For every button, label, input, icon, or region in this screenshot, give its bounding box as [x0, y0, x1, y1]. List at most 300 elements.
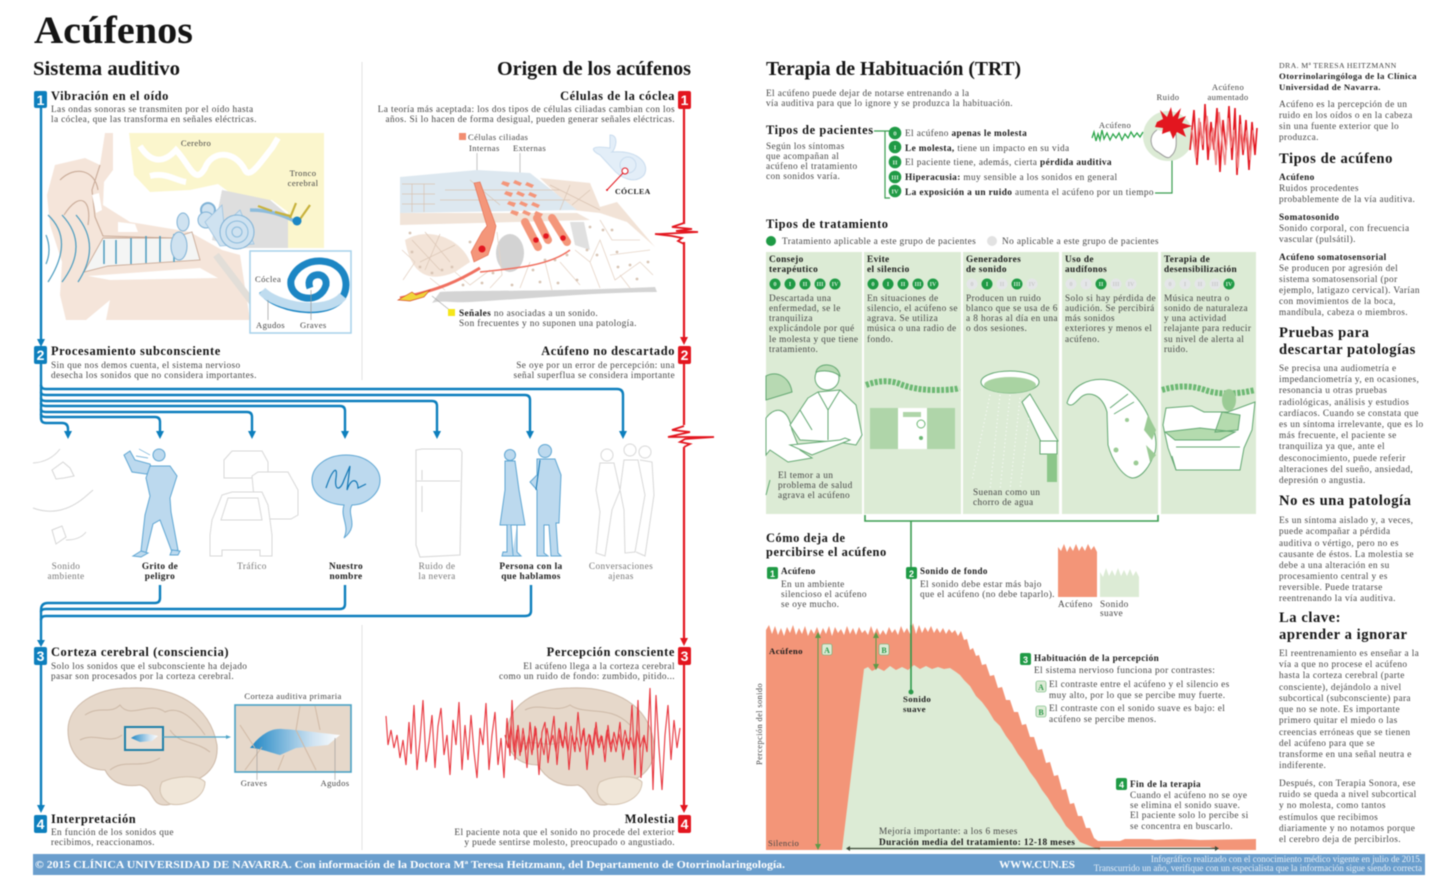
icon: grito de peligro: [124, 449, 180, 557]
step 2: sonido de fondo: El sonido debe estar más bajo: [920, 580, 1042, 590]
illustration: ear anatomy: Cerebro: [181, 138, 211, 148]
step 4: interpretación: En función de los sonidos que: [51, 827, 174, 838]
panel: uso de audífonos: [1062, 252, 1158, 514]
sidebar: la clave: el cerebro deja de percibirlos.: [1279, 835, 1401, 845]
step 3: corteza cerebral: [34, 645, 247, 682]
panel: uso de audífonos: III: [1112, 282, 1120, 288]
patient types bracket and list: Hiperacusia: muy sensible a los sonidos en general: [905, 173, 1117, 183]
panel: generadores de sonido: a 8 horas al día en una: [966, 314, 1058, 324]
sidebar: pruebas para descartar patologías: radiológicas, análisis y estudios: [1279, 398, 1409, 408]
heading: cómo deja de percibirse: [766, 531, 887, 559]
legend: células ciliadas: [459, 132, 546, 182]
patient types bracket and list: II: [892, 160, 898, 166]
sidebar: pruebas para descartar patologías: alteraciones del sueño, ansiedad,: [1279, 465, 1413, 475]
sidebar: no es una patología: [1279, 493, 1414, 604]
label: conversaciones ajenas: Conversaciones: [589, 562, 653, 572]
origin 4: molestia: El paciente nota que el sonido no procede del exterior: [454, 828, 676, 838]
step 2: sonido de fondo: que el acúfeno (no debe taparlo).: [920, 589, 1055, 600]
chart: perception over time: Duración media del tratamiento: 12-18 meses: [879, 838, 1075, 848]
sidebar: author and intro: Otorrinolaringóloga de la Clínica: [1279, 71, 1417, 81]
origin 2: acúfeno no descartado: [514, 344, 691, 381]
sidebar: la clave: creencias erróneas que se tienen: [1279, 728, 1410, 738]
panel: terapia de desensibilización: y una actividad: [1164, 314, 1226, 324]
origin 2: acúfeno no descartado: Se oye por un error de percepción: una: [516, 361, 675, 371]
step 1: acúfeno: silencioso el acúfeno: [781, 589, 867, 600]
footer band: Infográfico realizado con el conocimiento médico vigente en julio de 2015.: [1151, 854, 1422, 864]
sidebar: tipos de acúfeno: sistema somatosensorial (por: [1279, 274, 1398, 285]
panel: uso de audífonos: Uso de: [1065, 255, 1094, 265]
sidebar: la clave: diariamente y no notamos porque: [1279, 824, 1415, 834]
panel: generadores de sonido: III: [1013, 282, 1021, 288]
sidebar: tipos de acúfeno: vascular (pulsátil).: [1279, 234, 1356, 245]
sidebar: la clave: Después, con Terapia Sonora, ese: [1279, 779, 1416, 789]
panel: terapia de desensibilización: sonido de naturaleza: [1164, 304, 1248, 314]
step 4: fin de la terapia: El paciente solo lo percibe si: [1130, 811, 1249, 821]
sidebar: tipos de acúfeno: Somatosonido: [1279, 213, 1339, 223]
chart: perception over time: Silencio: [768, 838, 799, 848]
step 3: habituación de la percepción: 3: [1023, 655, 1028, 665]
step 1: acúfeno: se oye mucho.: [781, 600, 839, 610]
patient types bracket and list: I: [894, 144, 897, 152]
icon: speech bubble nuestro nombre: [312, 455, 380, 538]
label: sonido ambiente: Sonido: [52, 562, 80, 572]
step 2: procesamiento subconsciente: Sin que nos demos cuenta, el sistema nervioso: [51, 361, 241, 371]
chart: perception over time: Sonido: [903, 694, 931, 704]
chart: perception over time: suave: [903, 704, 926, 714]
heading: cómo deja de percibirse: percibirse el acúfeno: [766, 545, 887, 559]
step 4: fin de la terapia: Cuando el acúfeno no se oye: [1130, 790, 1247, 801]
panel: uso de audífonos: 0: [1070, 282, 1072, 288]
panel: generadores de sonido: 0: [970, 282, 974, 288]
sidebar: pruebas para descartar patologías: tranquiliza ya que, ante el: [1279, 442, 1385, 452]
legend: células ciliadas: Células ciliadas: [468, 132, 529, 142]
step 3: habituación de la percepción: acúfeno se percibe menos.: [1049, 714, 1157, 725]
label: conversaciones ajenas: ajenas: [608, 572, 634, 582]
step 1: vibración en el oído: Las ondas sonoras se transmiten por el oído hasta: [51, 105, 253, 115]
step 3: habituación de la percepción: muy alto, por lo que se percibe muy fuerte.: [1049, 690, 1225, 701]
panel: consejo terapéutico: tranquiliza: [769, 314, 813, 324]
sidebar: author and intro: DRA. Mª TERESA HEITZMANN: [1279, 61, 1397, 70]
panel: consejo terapéutico: Consejo: [769, 255, 804, 265]
column dividers: [361, 62, 363, 850]
sidebar: tipos de acúfeno: Acúfeno: [1279, 173, 1315, 183]
step 3: habituación de la percepción: El contraste con el sonido suave es bajo: el: [1049, 704, 1225, 714]
blue arrowheads: [37, 339, 627, 813]
origin 1: células de la cóclea: 1: [681, 92, 689, 108]
panel: consejo terapéutico: tratamiento.: [769, 345, 818, 355]
heading: cómo deja de percibirse: Cómo deja de: [766, 531, 846, 545]
step 1: acúfeno: En un ambiente: [781, 580, 845, 590]
step 2: procesamiento subconsciente: Procesamiento subconsciente: [51, 344, 221, 358]
sidebar: la clave: subcortical (subconsciente) para: [1279, 693, 1411, 704]
origin 1: células de la cóclea: La teoría más aceptada: los dos tipos de células ciliadas cambian con los: [378, 105, 675, 115]
inset: corteza auditiva primaria: Corteza auditiva primaria: [244, 691, 342, 701]
mini chart: acúfeno vs sonido suave: Sonido: [1100, 600, 1129, 610]
panel: consejo terapéutico: problema de salud: [778, 481, 853, 491]
panel: generadores de sonido: [963, 252, 1059, 514]
panel: generadores de sonido: I: [986, 282, 989, 288]
inset: corteza auditiva primaria: Graves: [241, 778, 268, 788]
sidebar: no es una patología: reversible. Puede tratarse: [1279, 583, 1383, 593]
origin 3: percepción consciente: 3: [681, 648, 689, 664]
step 3: habituación de la percepción: Habituación de la percepción: [1034, 653, 1159, 663]
panel: terapia de desensibilización: I: [1184, 282, 1187, 288]
sidebar: pruebas para descartar patologías: cardíacos. Cuando se constata que: [1279, 409, 1419, 419]
note: señales: Son frecuentes y no suponen una patología.: [459, 318, 637, 329]
panel: consejo terapéutico: enfermedad, se le: [769, 303, 841, 314]
chart: perception over time: [755, 623, 1256, 851]
legend: células ciliadas: Internas: [469, 143, 500, 153]
illustration: hearing aid: [1067, 379, 1156, 478]
step 3: habituación de la percepción: A: [1038, 683, 1044, 692]
panel: terapia de desensibilización: IV: [1226, 282, 1233, 288]
legend: células ciliadas: Externas: [513, 143, 546, 153]
step 1: vibración en el oído: la cóclea, que las transforma en señales eléctricas.: [51, 114, 257, 125]
step 1: vibración en el oído: Vibración en el oído: [51, 89, 169, 103]
label: sonido ambiente: ambiente: [47, 572, 85, 582]
panel: generadores de sonido: Generadores: [966, 255, 1021, 265]
sidebar: pruebas para descartar patologías: depresión o angustia.: [1279, 476, 1366, 486]
illustration: music stave and radio: [866, 381, 959, 449]
panel: generadores de sonido: o dos sesiones.: [966, 324, 1027, 334]
panel: generadores de sonido: II: [1000, 282, 1005, 288]
sidebar: no es una patología: puede acompañar a pérdida: [1279, 527, 1390, 537]
sidebar: pruebas para descartar patologías: desconocimiento, puede referir: [1279, 453, 1406, 464]
label: ruido de la nevera: [418, 562, 456, 582]
patient types bracket and list: III: [891, 174, 899, 182]
panel: uso de audífonos: I: [1085, 282, 1088, 288]
title: Acúfenos: [34, 8, 193, 52]
sidebar: tipos de acúfeno: con movimientos de la boca,: [1279, 297, 1396, 307]
label: ruido de la nevera: Ruido de: [419, 562, 455, 572]
patient types bracket and list: Le molesta, tiene un impacto en su vida: [905, 144, 1070, 154]
sidebar: la clave: ruido se queda a nivel subcortical: [1279, 790, 1417, 800]
patient types bracket and list: IV: [891, 188, 899, 196]
tipos de pacientes: que acompañan al: [766, 152, 839, 162]
panel: terapia de desensibilización: ruido.: [1164, 345, 1188, 355]
step 1: acúfeno: Acúfeno: [781, 566, 816, 576]
panel: generadores de sonido: Suenan como un: [973, 488, 1040, 498]
chart: perception over time: Percepción del sonido: [755, 683, 764, 765]
origin 3: percepción consciente: como un ruido de fondo: zumbido, pitido...: [499, 671, 675, 682]
step 3: corteza cerebral: 3: [37, 648, 45, 664]
panel: evite el silencio: música o una radio de: [867, 324, 957, 334]
step 3: habituación de la percepción: El sistema nervioso funciona por contrastes:: [1034, 665, 1215, 676]
sidebar: la clave: vía a que no procese el acúfeno: [1279, 659, 1407, 670]
sidebar: la clave: [1279, 610, 1419, 845]
panel: uso de audífonos: audición. Se percibirá: [1065, 304, 1155, 314]
origin 4: molestia: Molestia: [625, 812, 675, 826]
step 3: corteza cerebral: pasar son procesados por la corteza cerebral.: [51, 672, 234, 682]
sidebar: author and intro: produzca.: [1279, 133, 1319, 143]
origin 4: molestia: y puede sentirse molesto, preocupado o angustiado.: [464, 838, 675, 848]
inset: cochlea detail: Graves: [300, 320, 327, 330]
panel: generadores de sonido: Producen un ruido: [966, 294, 1041, 304]
heading: sistema auditivo: Sistema auditivo: [33, 59, 180, 80]
panel: terapia de desensibilización: su nivel de alerta al: [1164, 335, 1244, 345]
label: sonido ambiente: [47, 562, 85, 582]
panel: uso de audífonos: IV: [1128, 282, 1135, 288]
patient types bracket and list: El acúfeno apenas le molesta: [905, 128, 1027, 139]
sidebar: la clave: indiferente.: [1279, 760, 1326, 771]
sidebar: tipos de acúfeno: probablemente de la vía auditiva.: [1279, 195, 1415, 205]
illustration: brain with auditory cortex: [68, 688, 231, 805]
panel: terapia de desensibilización: 0: [1168, 282, 1172, 288]
sidebar: no es una patología: No es una patología: [1279, 493, 1412, 509]
step 1: acúfeno: 1: [770, 569, 775, 579]
panel: consejo terapéutico: agrava el acúfeno: [778, 490, 850, 501]
sidebar: tipos de acúfeno: Acúfeno somatosensorial: [1279, 253, 1387, 263]
heading: tipos de tratamiento: Tipos de tratamiento: [766, 217, 889, 231]
sidebar: pruebas para descartar patologías: es un síntoma irrelevante, que es lo: [1279, 420, 1424, 430]
note: señales: [448, 309, 637, 329]
step 1: vibración en el oído: [34, 89, 257, 125]
icon: cochlea locator: CÓCLEA: [615, 186, 651, 196]
step 2: sonido de fondo: Sonido de fondo: [920, 566, 988, 576]
red vertical flow line with spikes: [655, 108, 714, 806]
panel: evite el silencio: 0: [872, 282, 874, 288]
inset: corteza auditiva primaria: Agudos: [320, 778, 350, 788]
icon: persona con la que hablamos: [500, 444, 561, 556]
step 1: vibración en el oído: 1: [37, 92, 45, 108]
icon: sonido ambiente: [33, 449, 93, 544]
icon: tráfico: [210, 451, 298, 556]
panel: evite el silencio: IV: [930, 282, 937, 288]
panel: terapia de desensibilización: Música neutra o: [1164, 294, 1230, 304]
step 3: habituación de la percepción: El contraste entre el acúfeno y el silencio es: [1049, 679, 1230, 690]
panel: evite el silencio: Evite: [867, 255, 890, 265]
illustration: doctor and patient: [766, 365, 862, 495]
sidebar: la clave: consciente), dejándolo a nivel: [1279, 682, 1401, 693]
label: grito de peligro: peligro: [145, 572, 175, 582]
green bracket connecting panels: [865, 515, 1158, 630]
origin 1: células de la cóclea: [378, 89, 691, 125]
origin 4: molestia: [454, 812, 691, 848]
sidebar: la clave: El reentrenamiento es enseñar a la: [1279, 649, 1419, 659]
step 3: habituación de la percepción: [1020, 653, 1230, 725]
panel: consejo terapéutico: explicándole por qué: [769, 324, 855, 334]
sidebar: tipos de acúfeno: Tipos de acúfeno: [1279, 151, 1393, 167]
panel: consejo terapéutico: terapéutico: [769, 265, 818, 275]
inset: cochlea detail: [250, 251, 351, 333]
sidebar: tipos de acúfeno: Se producen por agresión del: [1279, 264, 1398, 274]
treatment legend: [766, 236, 1159, 247]
sidebar: author and intro: Universidad de Navarra.: [1279, 82, 1381, 92]
mini chart: acúfeno vs sonido suave: suave: [1100, 609, 1123, 619]
TRT intro: El acúfeno puede dejar de notarse entrenando a la: [766, 88, 969, 99]
chart: perception over time: A: [824, 646, 830, 655]
panel: consejo terapéutico: 0: [774, 282, 776, 288]
panel: evite el silencio: fondo.: [867, 334, 893, 345]
sidebar: tipos de acúfeno: Sonido corporal, con frecuencia: [1279, 223, 1410, 234]
panel: terapia de desensibilización: Terapia de: [1164, 255, 1210, 265]
sidebar: author and intro: ruido en los oídos o en la cabeza: [1279, 111, 1413, 121]
sidebar: tipos de acúfeno: [1279, 151, 1420, 318]
mini chart: acúfeno vs sonido suave: Acúfeno: [1058, 599, 1093, 610]
heading: origen de los acúfenos: Origen de los acúfenos: [497, 59, 691, 80]
panel: uso de audífonos: exteriores y menos el: [1065, 324, 1152, 334]
sidebar: author and intro: sin una fuente exterior que lo: [1279, 121, 1399, 132]
patient types bracket and list: 0: [893, 130, 897, 138]
illustration: woman on sofa: [1162, 386, 1255, 470]
sidebar: tipos de acúfeno: mandíbula, cabeza o miembros.: [1279, 308, 1408, 318]
tipos de pacientes: con sonidos varía.: [766, 172, 840, 182]
treatment legend: No aplicable a este grupo de pacientes: [1002, 237, 1159, 247]
panel: terapia de desensibilización: relajante para reducir: [1164, 324, 1252, 334]
sidebar: author and intro: Acúfeno es la percepción de un: [1279, 99, 1407, 110]
origin 1: células de la cóclea: Células de la cóclea: [560, 89, 675, 103]
illustration: ear anatomy: [46, 133, 324, 320]
panel: consejo terapéutico: III: [816, 282, 824, 288]
label: tráfico: Tráfico: [237, 561, 267, 572]
treatment legend: Tratamiento aplicable a este grupo de pacientes: [782, 237, 976, 247]
step 2: sonido de fondo: 2: [909, 569, 914, 579]
step 3: corteza cerebral: Solo los sonidos que el subconsciente ha dejado: [51, 662, 247, 672]
footer band: [33, 854, 1425, 875]
panel: uso de audífonos: acúfeno.: [1065, 334, 1100, 345]
icon: cochlea locator: [593, 135, 651, 196]
panel: evite el silencio: silencio, el acúfeno se: [867, 303, 958, 314]
step 2: sonido de fondo: [906, 566, 1055, 600]
panel: uso de audífonos: Solo si hay pérdida de: [1065, 294, 1156, 304]
label: nuestro nombre: nombre: [329, 572, 363, 582]
blue vertical flow line: [41, 100, 623, 806]
panel: evite el silencio: I: [887, 282, 890, 288]
sidebar: tipos de acúfeno: Ruidos procedentes: [1279, 184, 1359, 194]
tipos de pacientes: [766, 123, 874, 182]
panel: consejo terapéutico: Descartada una: [769, 294, 831, 304]
footer band: Transcurrido un año, verifique con un especialista que la información sigue siendo correcta: [1094, 863, 1422, 873]
origin 2: acúfeno no descartado: Acúfeno no descartado: [541, 344, 675, 358]
sidebar: no es una patología: Es un síntoma aislado y, a veces,: [1279, 516, 1413, 526]
step 1: acúfeno: [767, 566, 867, 610]
chart: noise increases tinnitus: [1092, 82, 1257, 175]
TRT intro: [766, 88, 1013, 109]
heading: terapia de habituación: Terapia de Habituación (TRT): [766, 59, 1021, 80]
TRT intro: vía auditiva para que lo ignore y se produzca la habituación.: [766, 99, 1013, 109]
inset: corteza auditiva primaria: [235, 691, 351, 788]
tipos de pacientes: Tipos de pacientes: [766, 123, 874, 137]
label: grito de peligro: Grito de: [142, 562, 178, 572]
sidebar: tipos de acúfeno: ejemplo, latigazo cervical). Varían: [1279, 285, 1420, 296]
origin 3: percepción consciente: [499, 645, 691, 682]
label: persona con la que hablamos: que hablamos: [501, 572, 561, 582]
red arrowheads: [680, 337, 688, 813]
patient types bracket and list: [874, 127, 1172, 198]
step 4: fin de la terapia: se concentra en buscarlo.: [1130, 822, 1233, 832]
label: nuestro nombre: Nuestro: [329, 562, 363, 572]
sidebar: la clave: del acúfeno para que se: [1279, 738, 1375, 749]
mini chart: acúfeno vs sonido suave: [1058, 544, 1139, 619]
origin 3: percepción consciente: Percepción consciente: [547, 645, 675, 659]
chart: noise increases tinnitus: Acúfeno: [1212, 82, 1244, 92]
panel: terapia de desensibilización: desensibilización: [1164, 265, 1238, 275]
sidebar: la clave: transforme en una señal neutra e: [1279, 749, 1412, 760]
patient types bracket and list: El paciente tiene, además, cierta pérdida auditiva: [905, 158, 1112, 168]
panel: evite el silencio: [864, 252, 961, 514]
origin 1: células de la cóclea: años. Si lo hacen de forma desigual, pueden generar señales eléctricas.: [385, 114, 675, 125]
sidebar: la clave: que no se note. Es importante: [1279, 705, 1400, 715]
label: ruido de la nevera: la nevera: [418, 572, 456, 582]
label: nuestro nombre: [329, 562, 363, 582]
label: conversaciones ajenas: [589, 562, 653, 582]
panel: terapia de desensibilización: [1161, 252, 1256, 514]
label: grito de peligro: [142, 562, 178, 582]
sidebar: no es una patología: debe a una alteración en su: [1279, 561, 1390, 571]
origin 4: molestia: 4: [681, 816, 689, 832]
step 4: fin de la terapia: 4: [1119, 780, 1124, 790]
sidebar: la clave: y no molesta, como tantos: [1279, 801, 1386, 811]
illustration: ear anatomy: Tronco: [290, 168, 316, 178]
footer band: © 2015 CLÍNICA UNIVERSIDAD DE NAVARRA. Con información de la Doctora Mª Teresa Heitzmann, del Departamento de Otorrinolaringología.: [35, 859, 785, 871]
step 4: interpretación: recibimos, reaccionamos.: [51, 838, 155, 848]
sidebar: pruebas para descartar patologías: resonancia u otras pruebas: [1279, 386, 1387, 396]
sidebar: la clave: estímulos que recibimos: [1279, 813, 1378, 823]
panel: uso de audífonos: audífonos: [1065, 265, 1107, 275]
step 4: interpretación: Interpretación: [51, 812, 136, 826]
panel: evite el silencio: el silencio: [867, 265, 910, 275]
panel: terapia de desensibilización: II: [1198, 282, 1203, 288]
sidebar: la clave: La clave:: [1279, 610, 1341, 626]
chart: perception over time: Acúfeno: [769, 646, 803, 656]
illustration: ear anatomy: cerebral: [288, 178, 319, 188]
sidebar: la clave: hasta la corteza cerebral (parte: [1279, 670, 1405, 681]
chart: noise increases tinnitus: Acúfeno: [1099, 120, 1131, 130]
illustration: shower head: [972, 371, 1058, 490]
chart: noise increases tinnitus: aumentado: [1207, 92, 1249, 102]
sidebar: pruebas para descartar patologías: impedanciometría y, en ocasiones,: [1279, 375, 1419, 385]
tipos de pacientes: Según los síntomas: [766, 142, 845, 152]
panel: evite el silencio: III: [914, 282, 922, 288]
footer band: WWW.CUN.ES: [999, 860, 1075, 871]
chart: perception over time: Mejoría importante: a los 6 meses: [879, 827, 1018, 837]
label: persona con la que hablamos: [499, 562, 563, 582]
sidebar: pruebas para descartar patologías: Pruebas para: [1279, 325, 1370, 341]
step 4: fin de la terapia: [1116, 778, 1249, 832]
sidebar: pruebas para descartar patologías: Se precisa una audiometría e: [1279, 364, 1397, 374]
step 2: procesamiento subconsciente: desecha los sonidos que no considera importantes.: [51, 371, 257, 381]
step 2: procesamiento subconsciente: 2: [37, 347, 45, 363]
panel: consejo terapéutico: IV: [832, 282, 839, 288]
panel: consejo terapéutico: II: [803, 282, 808, 288]
panel: generadores de sonido: chorro de agua: [973, 498, 1034, 508]
panel: consejo terapéutico: le molesta y que tiene: [769, 335, 858, 345]
icon: nevera: [416, 449, 462, 557]
sidebar: pruebas para descartar patologías: descartar patologías: [1279, 342, 1416, 358]
step 3: habituación de la percepción: B: [1038, 708, 1044, 717]
panel: evite el silencio: agrava. Se utiliza: [867, 314, 938, 324]
chart: perception over time: B: [881, 646, 887, 655]
chart: noise increases tinnitus: Ruido: [1157, 92, 1179, 102]
panel: uso de audífonos: más sonidos: [1065, 314, 1115, 324]
patient types bracket and list: La exposición a un ruido aumenta el acúfeno por un tiempo: [905, 187, 1154, 198]
note: señales: Señales no asociadas a un sonido.: [459, 309, 598, 319]
illustration: brain with tinnitus waveform: [386, 688, 680, 805]
step 4: fin de la terapia: Fin de la terapia: [1130, 779, 1201, 789]
panel: consejo terapéutico: [766, 252, 862, 514]
step 4: fin de la terapia: se elimina el sonido suave.: [1130, 801, 1240, 811]
sidebar: author and intro: [1279, 61, 1417, 143]
origin 2: acúfeno no descartado: 2: [681, 347, 689, 363]
step 4: interpretación: 4: [37, 816, 45, 832]
sidebar: no es una patología: causante de éstos. La molestia se: [1279, 550, 1414, 560]
panel: evite el silencio: En situaciones de: [867, 294, 939, 304]
panel: consejo terapéutico: El temor a un: [778, 471, 833, 481]
origin 3: percepción consciente: El acúfeno llega a la corteza cerebral: [523, 661, 675, 672]
sidebar: no es una patología: auditiva o vértigo, pero no es: [1279, 539, 1399, 549]
sidebar: pruebas para descartar patologías: [1279, 325, 1424, 486]
panel: generadores de sonido: blanco que se usa de 6: [966, 304, 1058, 314]
